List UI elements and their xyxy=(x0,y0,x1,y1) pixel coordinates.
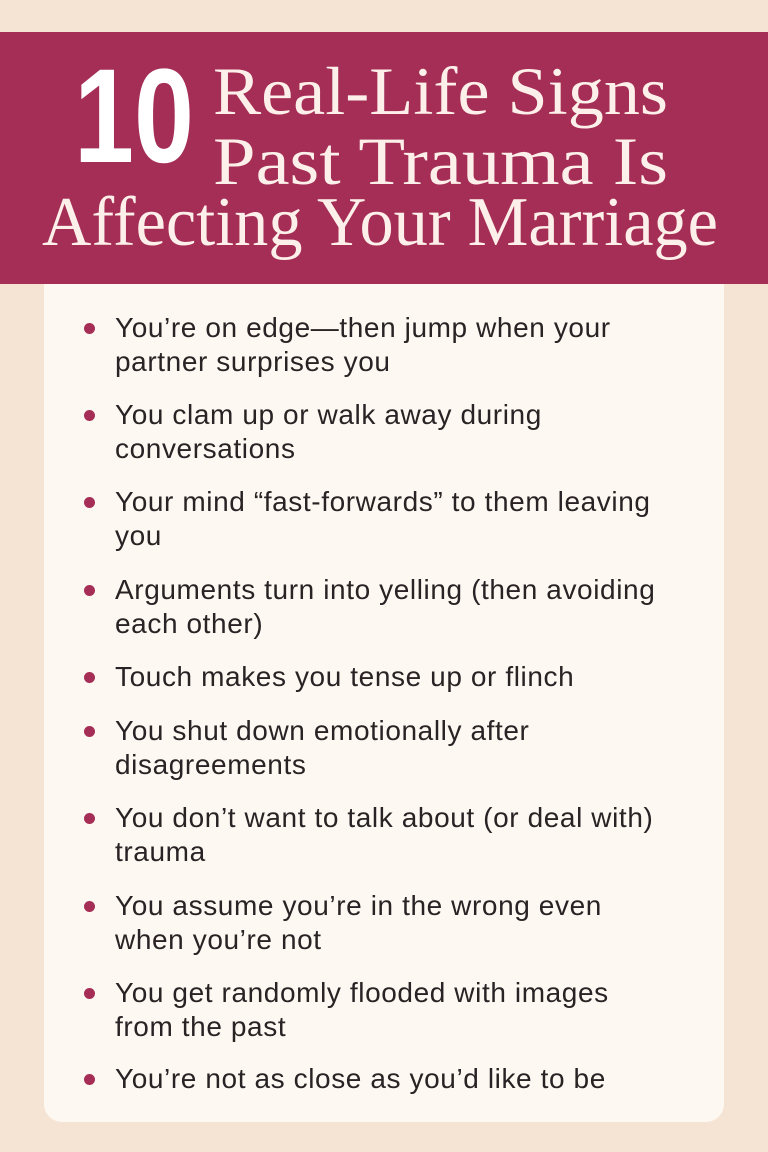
title xyxy=(42,42,718,261)
item 5: Touch makes you tense up or flinch xyxy=(115,661,574,692)
panel: list card xyxy=(44,284,724,1122)
item 7 xyxy=(84,802,653,867)
title: Past Trauma Is xyxy=(213,123,668,199)
item 6: You shut down emotionally after xyxy=(115,715,529,746)
item 4: each other) xyxy=(115,608,263,639)
item 7: You don’t want to talk about (or deal with) xyxy=(115,802,653,833)
item 8: when you’re not xyxy=(115,924,322,955)
item 1: You’re on edge—then jump when your xyxy=(115,312,611,343)
title: Real-Life Signs xyxy=(213,53,668,129)
item 3: Your mind “fast-forwards” to them leaving xyxy=(115,486,651,517)
title: Affecting Your Marriage xyxy=(42,184,718,261)
item 3 xyxy=(84,486,651,551)
item 6 xyxy=(84,715,529,780)
item 6: disagreements xyxy=(115,749,306,780)
title band xyxy=(0,32,768,284)
item 3: you xyxy=(115,520,162,551)
item 2: conversations xyxy=(115,433,296,464)
item 1: partner surprises you xyxy=(115,346,391,377)
item 9: from the past xyxy=(115,1011,286,1042)
item 8: You assume you’re in the wrong even xyxy=(115,890,602,921)
item 9 xyxy=(84,977,609,1042)
item 9: You get randomly flooded with images xyxy=(115,977,609,1008)
title: 10 xyxy=(74,42,194,191)
item 7: trauma xyxy=(115,836,206,867)
item 10: You’re not as close as you’d like to be xyxy=(115,1063,606,1094)
item 2 xyxy=(84,399,542,464)
item 2: You clam up or walk away during xyxy=(115,399,542,430)
item 8 xyxy=(84,890,602,955)
item 4: Arguments turn into yelling (then avoiding xyxy=(115,574,655,605)
item 1 xyxy=(84,312,611,377)
item 4 xyxy=(84,574,655,639)
